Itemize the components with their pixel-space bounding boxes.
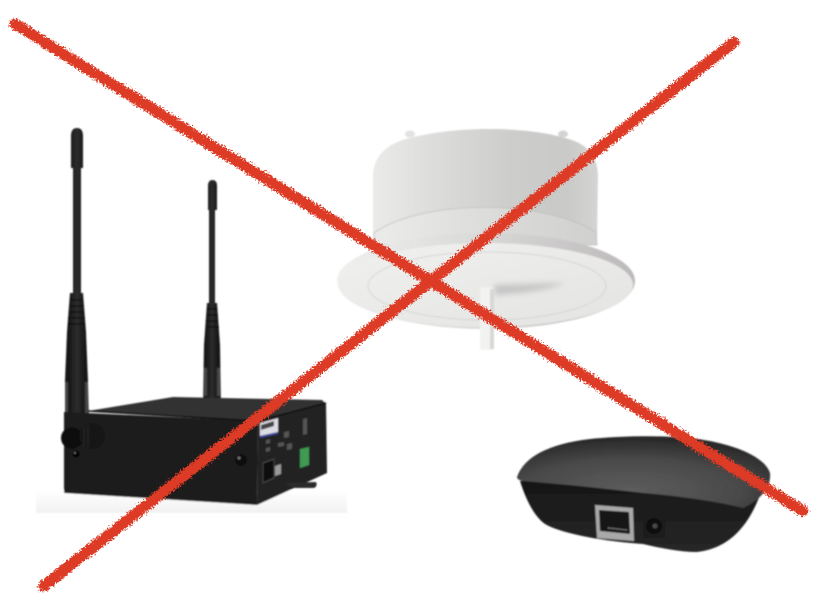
box front face [64, 412, 258, 505]
label sticker [260, 418, 278, 438]
ethernet jack [595, 505, 634, 541]
mounting foot [284, 482, 317, 488]
flange rim [337, 233, 635, 329]
hub top shell [517, 436, 770, 508]
device: black round hub [517, 436, 770, 552]
port markings [266, 418, 307, 452]
box top face [88, 397, 326, 421]
stem [480, 287, 494, 350]
DC power jack [643, 512, 665, 538]
stroke 2 [44, 42, 734, 586]
antenna connector [61, 423, 105, 458]
device: black gateway with two antennas [36, 128, 347, 513]
screw [235, 454, 247, 466]
ethernet port [263, 459, 274, 483]
box right face [257, 403, 327, 505]
hub lower shell [520, 470, 760, 552]
flange face [339, 243, 633, 327]
green terminal block [300, 447, 309, 468]
antenna: right [203, 180, 221, 412]
dome body [373, 129, 598, 240]
stem shadow [494, 283, 565, 295]
floor shadow strip [36, 490, 347, 513]
stroke 1 [15, 24, 803, 511]
body lower band [374, 207, 597, 245]
inner ring [368, 252, 606, 320]
edge highlight [88, 403, 326, 421]
device: white ceiling dome [337, 129, 635, 350]
antenna: left [65, 128, 89, 425]
switch module [275, 464, 281, 476]
tabs [405, 130, 415, 138]
